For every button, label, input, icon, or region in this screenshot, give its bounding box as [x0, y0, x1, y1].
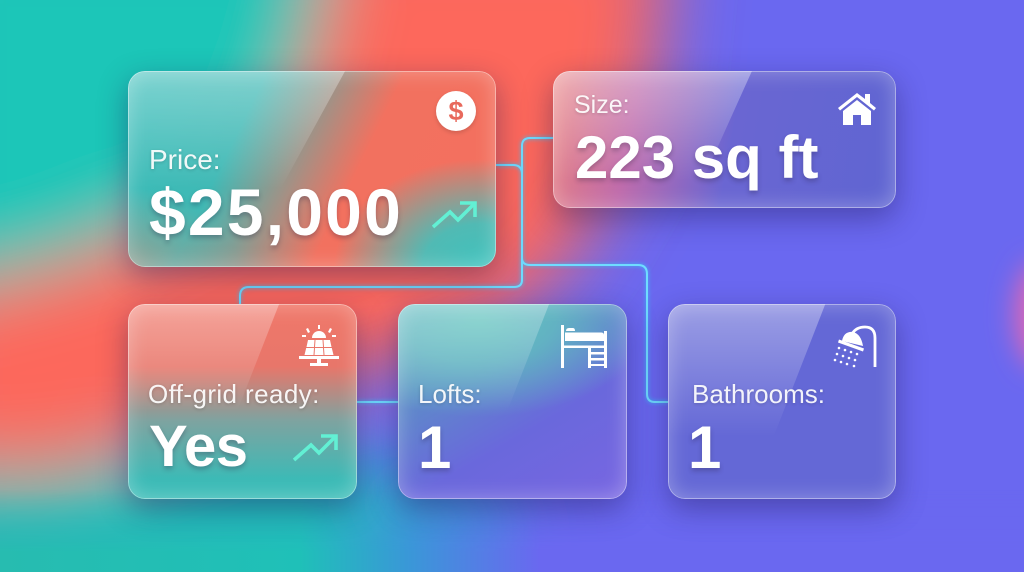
value: lofts: 1 [418, 414, 451, 481]
panel: size [553, 71, 896, 208]
icon: dollar coin [436, 91, 476, 131]
background bottom band [0, 495, 542, 572]
label: price: Price: [149, 144, 221, 175]
value: price: $25,000 [149, 175, 403, 249]
value: off-grid ready: Yes [149, 414, 248, 479]
icon: loft bed [561, 325, 607, 368]
label: lofts: Lofts: [418, 379, 482, 409]
label: size: Size: [574, 91, 630, 119]
icon: trend arrow [432, 201, 477, 228]
label: bathrooms: Bathrooms: [692, 379, 825, 409]
value: bathrooms: 1 [688, 414, 721, 481]
panel: off-grid ready [128, 304, 357, 499]
icon: dollar coin: $ [448, 96, 464, 126]
icon: trend arrow [293, 434, 338, 462]
value: size: 223 sq ft [575, 124, 818, 191]
icon: solar panel [299, 325, 339, 366]
panel: price [128, 71, 496, 267]
label: off-grid ready: Off-grid ready: [148, 379, 320, 409]
panel: bathrooms [668, 304, 896, 499]
icon: shower [834, 326, 876, 368]
panel: lofts [398, 304, 627, 499]
icon: house [838, 93, 876, 125]
